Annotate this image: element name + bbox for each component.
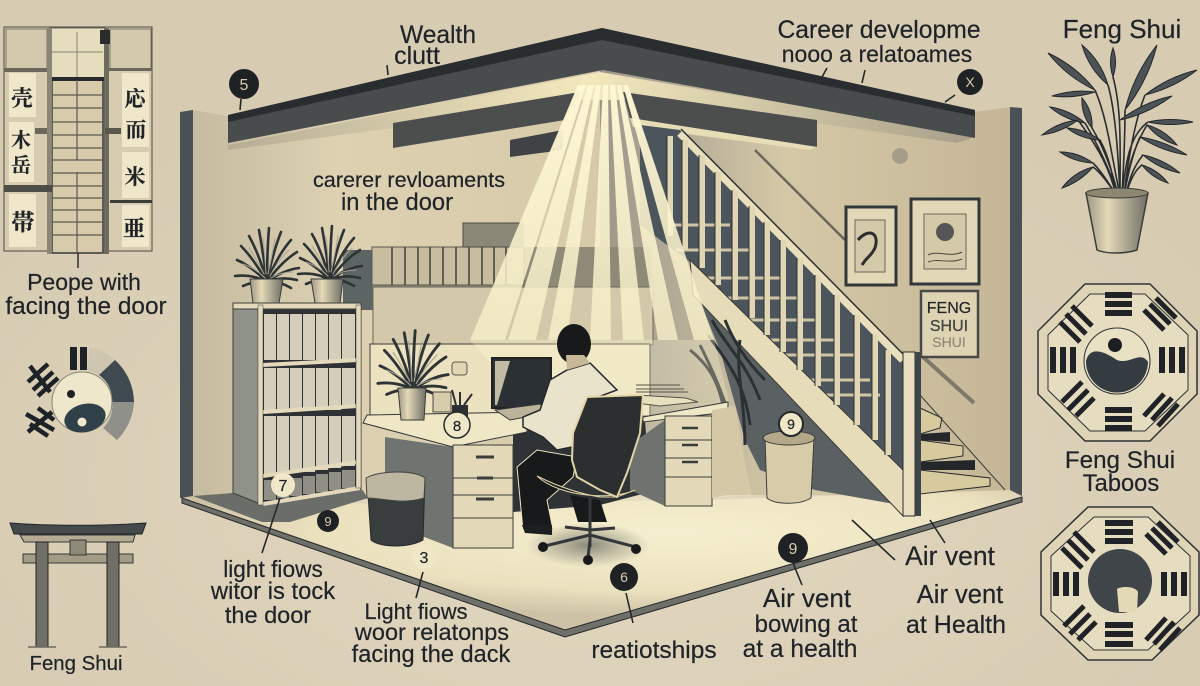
trash can left bbox=[366, 472, 425, 546]
number badges: 9 bbox=[787, 416, 795, 432]
wall sign: feng shui: SHUI bbox=[930, 318, 968, 335]
label: light flows one: witor is tock bbox=[210, 578, 335, 605]
number badges: X bbox=[965, 74, 975, 90]
label: air vent bowing: Air vent bbox=[763, 583, 852, 613]
label: air vent bowing: bowing at bbox=[755, 611, 858, 638]
wall sign: feng shui: FENG bbox=[927, 300, 971, 317]
label: feng shui taboos: Taboos bbox=[1083, 471, 1159, 497]
partition bbox=[370, 344, 650, 416]
number badges: 9 bbox=[789, 541, 798, 558]
icon: bagua with dark centre bbox=[1041, 507, 1199, 660]
label: career in the door: carerer revloaments bbox=[313, 167, 505, 192]
desk bbox=[363, 402, 750, 548]
label: light flows two: Light fiows bbox=[365, 599, 468, 624]
caption: people with facing the door bbox=[5, 269, 167, 320]
right wall edge bbox=[1010, 107, 1022, 496]
wall sign: feng shui: SHUI bbox=[932, 334, 966, 350]
caption: people with facing the door: Peope with bbox=[27, 269, 141, 295]
label: air vent bowing bbox=[743, 583, 858, 663]
label: light flows two: woor relatonps bbox=[354, 619, 509, 645]
left wall edge bbox=[180, 110, 193, 498]
icon: torii gate bbox=[10, 523, 146, 647]
label: career in the door bbox=[313, 167, 505, 216]
panel: door plan: 応 bbox=[124, 83, 148, 113]
trash can right bbox=[763, 431, 815, 503]
label: wealth clutter: clutt bbox=[394, 42, 440, 70]
label: light flows one bbox=[210, 556, 335, 628]
left wall bbox=[193, 60, 600, 495]
monitor bbox=[492, 358, 552, 420]
wall picture 1 bbox=[846, 207, 896, 285]
under-stair shadow bbox=[697, 295, 900, 505]
chair base bbox=[545, 497, 636, 558]
label: career development: Career developme bbox=[777, 17, 981, 44]
panel: door plan: 木 bbox=[11, 124, 31, 153]
light rays bbox=[470, 85, 752, 505]
caption: feng shui left: Feng Shui bbox=[30, 653, 122, 675]
label: feng shui taboos: Feng Shui bbox=[1065, 447, 1175, 474]
desk items bbox=[433, 362, 698, 422]
panel: door plan: 岳 bbox=[11, 149, 31, 178]
number badges: 7 bbox=[279, 478, 288, 495]
potted plant left bbox=[235, 228, 299, 303]
label: feng shui taboos bbox=[1065, 447, 1175, 497]
label: air vent bowing: at a health bbox=[743, 636, 857, 663]
wall vent dot bbox=[892, 148, 908, 164]
number badges: 6 bbox=[620, 569, 628, 585]
panel: door plan: 帯 bbox=[10, 204, 34, 237]
floor edge band bbox=[182, 497, 1022, 637]
plant behind desk bbox=[690, 320, 765, 445]
number badges: 9 bbox=[324, 514, 332, 529]
label: career development: nooo a relatoames bbox=[782, 41, 972, 67]
panel: room cutaway bbox=[180, 28, 1022, 637]
floor shadow by bookcase bbox=[193, 488, 368, 522]
caption: people with facing the door: facing the door bbox=[5, 293, 167, 320]
label: career development bbox=[777, 17, 981, 67]
office worker in chair bbox=[517, 324, 643, 565]
label: light flows two: facing the dack bbox=[352, 642, 511, 668]
desk plant bbox=[378, 331, 448, 420]
label: air vent at health: Air vent bbox=[917, 581, 1003, 609]
number badges: 8 bbox=[453, 418, 461, 435]
back panel bbox=[373, 287, 653, 345]
staircase bbox=[640, 125, 1005, 516]
wall sign: feng shui bbox=[921, 291, 978, 357]
label: light flows one: the door bbox=[225, 602, 311, 628]
icon: potted bamboo plant bbox=[1042, 45, 1197, 253]
icon: yin yang wheel bbox=[26, 347, 134, 440]
icon: bagua with yin yang bbox=[1038, 284, 1197, 441]
label: wealth clutter: Wealth bbox=[400, 22, 476, 49]
bookcase bbox=[233, 303, 361, 505]
label: light flows two bbox=[352, 599, 511, 668]
label: relationships: reatiotships bbox=[591, 637, 717, 664]
label: air vent: Air vent bbox=[905, 541, 996, 571]
panel: door plan: 亜 bbox=[123, 212, 145, 243]
number badges: 5 bbox=[240, 77, 249, 94]
panel: door plan: 米 bbox=[124, 161, 146, 191]
label: light flows one: light fiows bbox=[223, 556, 323, 582]
number badges: 3 bbox=[420, 550, 429, 567]
right wall bbox=[600, 60, 1010, 495]
label: wealth clutter bbox=[394, 22, 476, 70]
label leader lines bbox=[240, 65, 955, 623]
label: air vent at health: at Health bbox=[906, 611, 1006, 639]
ceiling beam bbox=[228, 28, 975, 157]
heading: feng shui top right: Feng Shui bbox=[1063, 14, 1181, 44]
label: career in the door: in the door bbox=[341, 190, 453, 216]
potted plant right bbox=[298, 226, 362, 303]
panel: door plan: 壳 bbox=[11, 82, 33, 113]
upper shelf of binders bbox=[343, 223, 652, 310]
chair floor shadow bbox=[526, 523, 650, 567]
label: air vent at health bbox=[906, 581, 1006, 639]
panel: door plan bbox=[4, 27, 152, 268]
number badges bbox=[229, 69, 983, 591]
panel: door plan: 而 bbox=[126, 114, 146, 144]
wall picture 2 bbox=[911, 199, 979, 284]
floor bbox=[182, 490, 1022, 630]
